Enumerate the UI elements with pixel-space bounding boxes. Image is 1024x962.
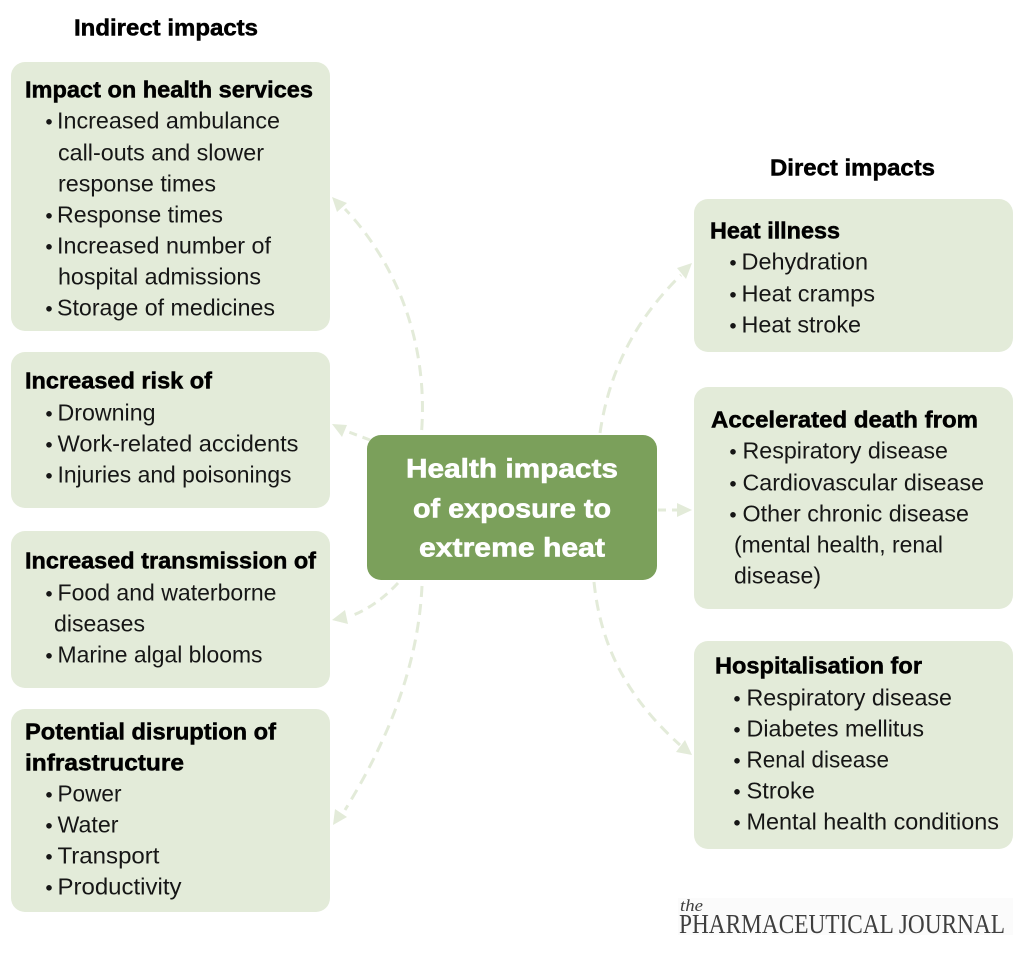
central box: health impacts of exposure to extreme heat [367,435,657,580]
list: Increased ambulance [57,108,280,134]
panel heading: Increased risk of [25,368,212,394]
panel: accelerated death from [694,387,1013,609]
list: (mental health, renal [734,532,943,558]
arrow: to transmission [332,583,398,624]
panel heading line 2: infrastructure [25,750,184,776]
list: Cardiovascular disease [742,470,984,496]
list: Dehydration [742,249,868,275]
list [730,438,984,589]
list: Stroke [746,778,815,804]
list: Other chronic disease [742,501,969,527]
list: Injuries and poisonings [58,462,292,488]
list [46,108,280,321]
list [46,781,182,900]
panel heading: Potential disruption of [25,719,276,745]
list [46,400,299,488]
list: Marine algal blooms [58,642,262,668]
list: Food and waterborne [58,580,276,606]
list: Renal disease [746,747,889,773]
panel heading: Impact on health services [25,77,313,103]
list [46,580,277,668]
list: Heat stroke [742,312,861,338]
logo: the Pharmaceutical Journal [678,896,1013,939]
arrows [332,197,692,825]
list: Respiratory disease [746,685,952,711]
arrow: to infrastructure [333,586,422,825]
panel heading: Heat illness [710,218,840,244]
list: diseases [54,611,145,637]
arrow: to heat illness [600,263,692,433]
panel: increased transmission of [11,531,330,688]
list: Storage of medicines [57,295,275,321]
list [730,249,875,338]
list: Work-related accidents [58,431,298,457]
list: Increased number of [57,233,272,259]
list: Water [58,812,119,838]
central box: health impacts of exposure to extreme heat: extreme heat [419,533,605,563]
panel heading: Hospitalisation for [715,653,922,679]
arrow: to health services [332,197,422,430]
panel: hospitalisation for [694,641,1013,849]
list: Power [58,781,122,807]
list: response times [58,171,216,197]
central box: health impacts of exposure to extreme heat: Health impacts [406,454,618,484]
list: Transport [58,843,160,869]
list: Respiratory disease [742,438,948,464]
list: Mental health conditions [746,809,999,835]
panel heading: Increased transmission of [25,548,316,574]
panel: increased risk of [11,352,330,508]
list: Diabetes mellitus [746,716,924,742]
arrow: to increased risk [332,424,370,440]
panel heading: Accelerated death from [711,407,978,433]
heading: direct impacts: Direct impacts [770,155,935,181]
list: hospital admissions [58,264,261,290]
logo: the Pharmaceutical Journal: the [680,896,703,915]
central box: health impacts of exposure to extreme heat: of exposure to [413,494,611,524]
list: call-outs and slower [58,140,264,166]
panel: heat illness [694,199,1013,352]
list: Response times [57,202,223,228]
panel: potential disruption of infrastructure [11,709,330,912]
heading: indirect impacts: Indirect impacts [74,15,258,41]
list [734,685,999,835]
list: disease) [734,563,821,589]
arrow: to hospitalisation [594,582,692,755]
list: Drowning [58,400,156,426]
list: Heat cramps [742,281,875,307]
list: Productivity [58,874,182,900]
panel: impact on health services [11,62,330,331]
arrow: to accelerated death [658,503,692,517]
